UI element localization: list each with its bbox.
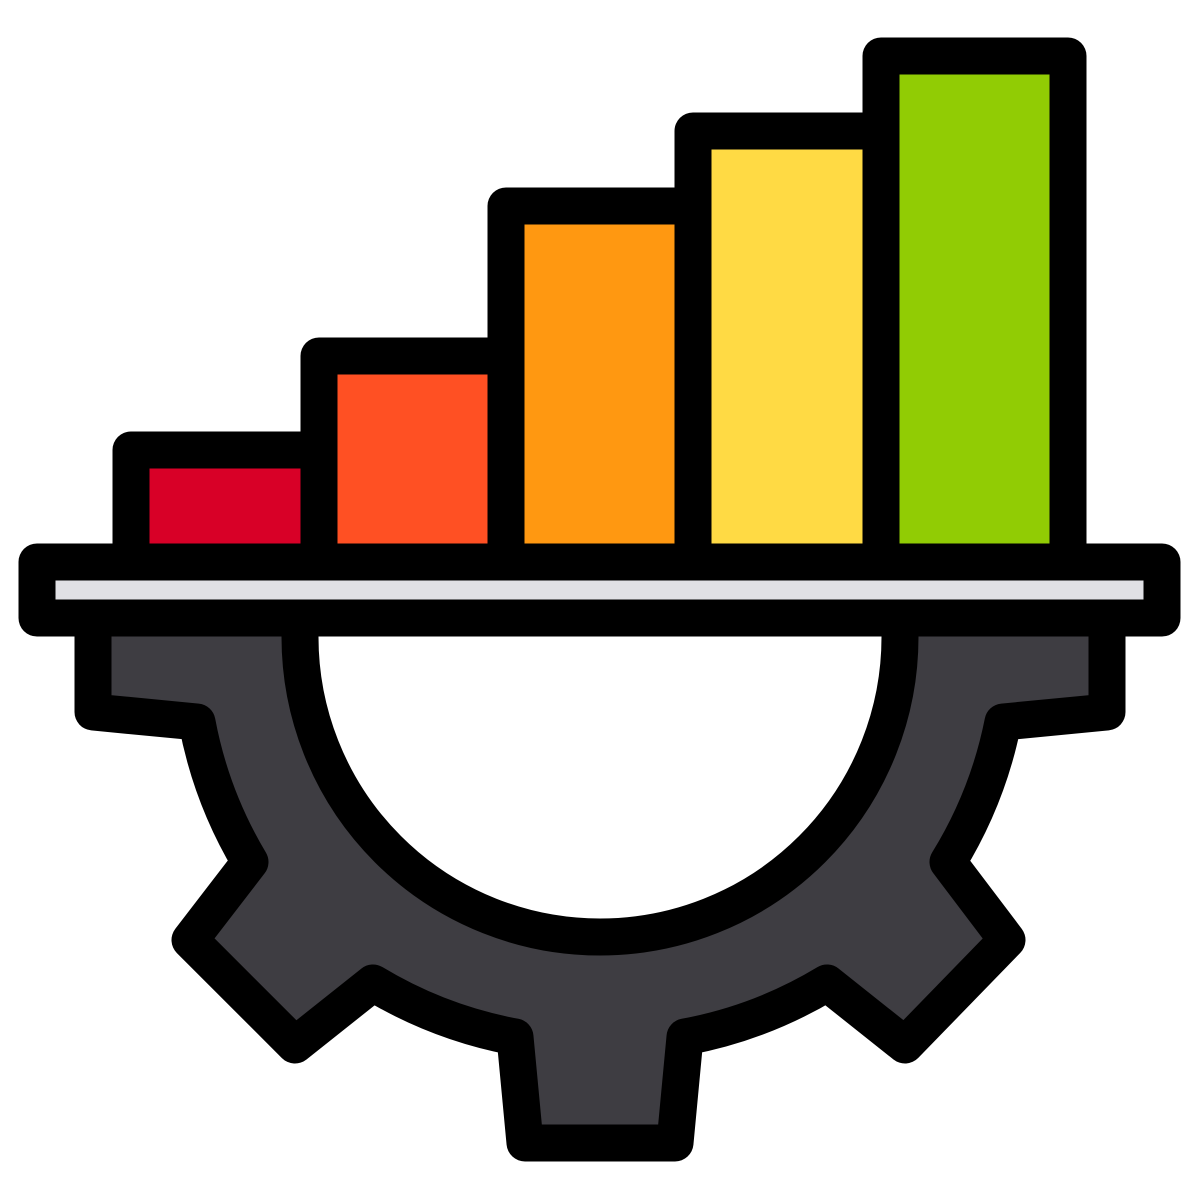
bar 1 red [131, 450, 319, 570]
bar chart [131, 56, 1068, 570]
bar 4 yellow [693, 131, 881, 570]
shelf [37, 562, 1162, 618]
bar 2 orange-red [319, 356, 506, 570]
bar 5 green [881, 56, 1068, 570]
gear [93, 618, 1107, 1143]
bar 3 orange [506, 206, 693, 570]
